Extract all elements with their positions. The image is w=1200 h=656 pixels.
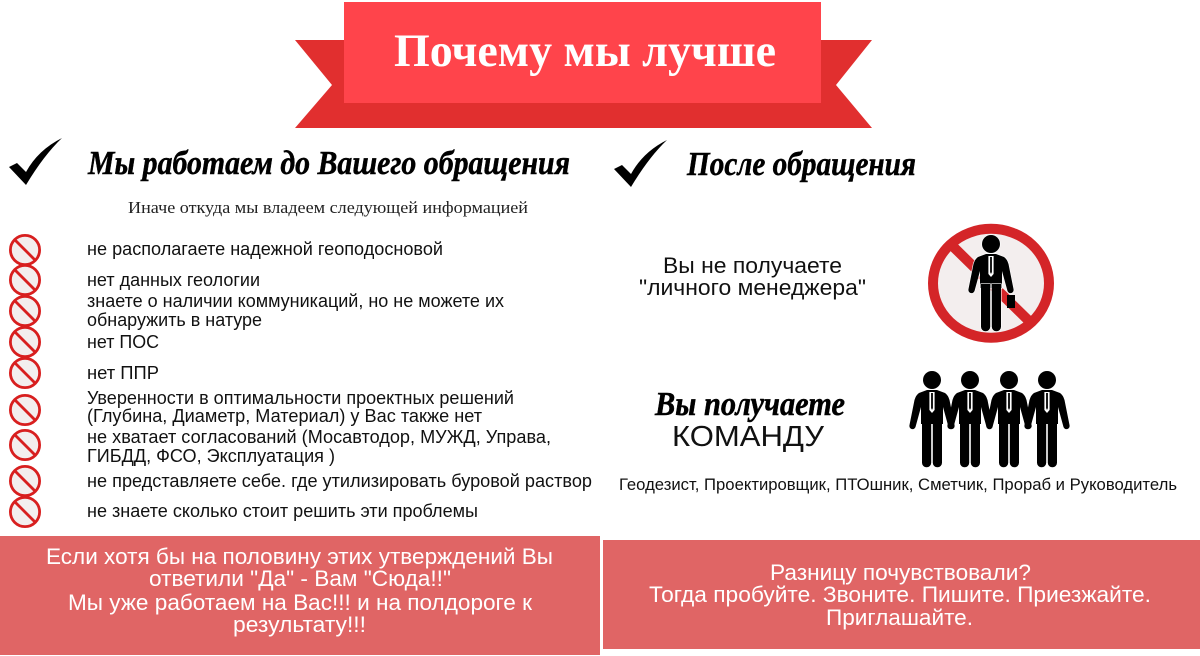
heading: after request: После обращения (686, 146, 916, 183)
list text: нет ППР (87, 363, 159, 383)
text: no personal manager: "личного менеджера" (639, 275, 866, 300)
panel: left call to action: результату!!! (233, 612, 366, 637)
text: you get a team (654, 386, 845, 453)
list text: нет данных геологии (87, 270, 260, 290)
panel: right call to action: Тогда пробуйте. Звоните. Пишите. Приезжайте. (649, 582, 1151, 607)
panel: right call to action: Приглашайте. (826, 605, 973, 630)
list text: не хватает согласований (Мосавтодор, МУЖД, Управа, (87, 427, 551, 447)
icon: check mark (9, 138, 62, 185)
ribbon back (295, 40, 872, 128)
text: no personal manager (639, 253, 866, 300)
title ribbon (295, 2, 872, 128)
title: Почему мы лучше (394, 25, 776, 77)
right column heading (614, 140, 916, 187)
icon: crossed-out manager (933, 229, 1049, 338)
list text (87, 239, 592, 521)
team roles: Геодезист, Проектировщик, ПТОшник, Сметчик, Прораб и Руководитель (619, 476, 1177, 494)
list text: не представляете себе. где утилизировать буровой раствор (87, 471, 592, 491)
panel: left call to action: Если хотя бы на половину этих утверждений Вы (46, 544, 553, 569)
panel: left call to action (0, 536, 600, 655)
list of problems (10, 235, 592, 527)
icon: check mark (614, 140, 667, 187)
subtitle: Иначе откуда мы владеем следующей информацией (128, 198, 528, 217)
icon: prohibition signs (10, 235, 40, 527)
text: you get a team: Вы получаете (654, 386, 845, 423)
panel: right call to action: Разницу почувствовали? (770, 560, 1031, 585)
panel: right call to action (603, 540, 1200, 649)
panel: left call to action: ответили "Да" - Вам "Сюда!!" (149, 566, 451, 591)
list text: не знаете сколько стоит решить эти проблемы (87, 501, 478, 521)
list text: знаете о наличии коммуникаций, но не можете их (87, 291, 504, 311)
left column heading (9, 138, 570, 185)
icon: team of four (909, 371, 1070, 467)
list text: Уверенности в оптимальности проектных решений (87, 388, 514, 408)
ribbon front (344, 2, 821, 103)
panel: left call to action: Мы уже работаем на Вас!!! и на полдороге к (68, 590, 532, 615)
list text: нет ПОС (87, 332, 159, 352)
list text: ГИБДД, ФСО, Эксплуатация ) (87, 446, 335, 466)
list text: (Глубина, Диаметр, Материал) у Вас также нет (87, 406, 482, 426)
text: no personal manager: Вы не получаете (663, 253, 842, 278)
text: you get a team: КОМАНДУ (672, 421, 825, 453)
list text: не располагаете надежной геоподосновой (87, 239, 443, 259)
heading: before request: Мы работаем до Вашего обращения (87, 145, 570, 182)
list text: обнаружить в натуре (87, 310, 262, 330)
